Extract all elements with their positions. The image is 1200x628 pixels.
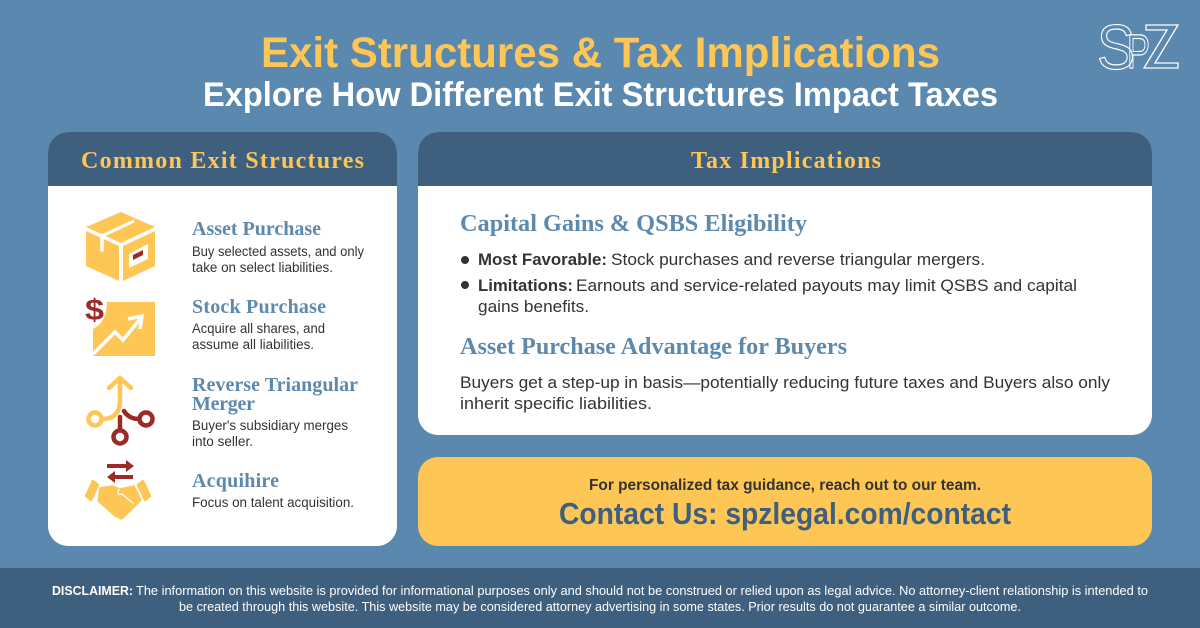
bullet: limitations: gains benefits. xyxy=(478,297,589,316)
heading: stock purchase: Stock Purchase xyxy=(192,296,326,318)
disclaimer text xyxy=(52,584,1148,614)
icon: merger arrows xyxy=(88,378,152,444)
text: reverse triangular merger: Buyer's subsidiary merges xyxy=(192,418,348,433)
callout: contact xyxy=(418,457,1152,546)
panel header: common exit structures xyxy=(48,132,397,186)
heading: common exit structures: Common Exit Structures xyxy=(81,148,364,174)
disclaimer band xyxy=(0,568,1200,628)
icon: stock chart xyxy=(85,294,155,356)
disclaimer text: be created through this website. This website may be considered attorney advertising in some states. Prior results do not guarantee a similar outcome. xyxy=(179,600,1021,614)
heading: reverse triangular merger: Merger xyxy=(192,393,255,415)
text: buyers step-up xyxy=(460,373,1110,413)
text: stock purchase xyxy=(192,321,325,352)
text: buyers step-up: Buyers get a step-up in basis—potentially reducing future taxes and Buyers also only xyxy=(460,373,1110,392)
icon: handshake xyxy=(86,460,150,519)
icon: box xyxy=(86,212,155,281)
text: reverse triangular merger xyxy=(192,418,348,449)
disclaimer text: DISCLAIMER: xyxy=(52,584,133,598)
heading: reverse triangular merger: Reverse Triangular xyxy=(192,374,358,396)
text: asset purchase: Buy selected assets, and only xyxy=(192,244,364,259)
text: acquihire: Focus on talent acquisition. xyxy=(192,495,354,510)
heading: asset purchase: Asset Purchase xyxy=(192,218,321,240)
panel header: tax implications xyxy=(418,132,1152,186)
panel: common exit structures xyxy=(48,132,397,546)
text: stock purchase: Acquire all shares, and xyxy=(192,321,325,336)
logo: SPZ xyxy=(1097,13,1178,83)
heading: asset purchase advantage: Asset Purchase Advantage for Buyers xyxy=(460,334,847,360)
text: asset purchase: take on select liabilities. xyxy=(192,260,333,275)
text: stock purchase: assume all liabilities. xyxy=(192,337,314,352)
contact link: Contact Us: spzlegal.com/contact xyxy=(559,496,1011,531)
disclaimer text: The information on this website is provided for informational purposes only and should not be construed or relied upon as legal advice. No attorney-client relationship is intended to xyxy=(136,584,1148,598)
heading: capital gains: Capital Gains & QSBS Eligibility xyxy=(460,211,807,237)
icon: stock chart: $ xyxy=(85,294,104,327)
bullet: limitations: Limitations: xyxy=(478,276,573,295)
callout text: For personalized tax guidance, reach out to our team. xyxy=(589,477,981,494)
heading: tax implications: Tax Implications xyxy=(691,148,881,174)
heading: reverse triangular merger xyxy=(192,374,358,415)
subtitle: Explore How Different Exit Structures Impact Taxes xyxy=(203,76,998,114)
logo: SPZ: S xyxy=(1097,13,1135,83)
title: Exit Structures & Tax Implications xyxy=(261,29,940,77)
logo: SPZ: P xyxy=(1127,26,1150,79)
bullet: most favorable: Most Favorable: xyxy=(478,250,607,269)
bullet: limitations: Earnouts and service-related payouts may limit QSBS and capital xyxy=(576,276,1077,295)
text: buyers step-up: inherit specific liabilities. xyxy=(460,394,652,413)
bullet: limitations xyxy=(461,276,1077,316)
text: asset purchase xyxy=(192,244,364,275)
text: reverse triangular merger: into seller. xyxy=(192,434,253,449)
bullet: most favorable: Stock purchases and reverse triangular mergers. xyxy=(611,250,985,269)
heading: acquihire: Acquihire xyxy=(192,470,279,492)
panel: tax implications xyxy=(418,132,1152,435)
